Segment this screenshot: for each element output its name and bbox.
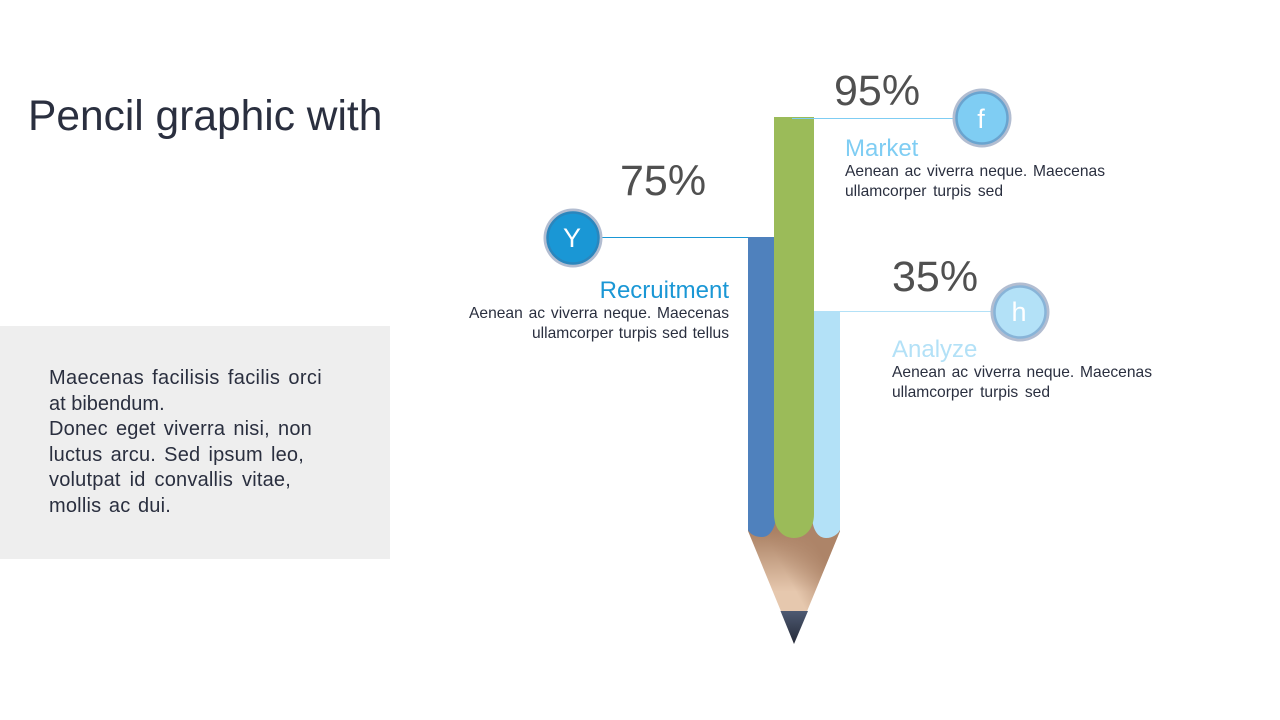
body: Analyze: Aenean ac viverra neque. Maecenas: [892, 364, 1152, 381]
pencil wood: [748, 520, 840, 643]
description text: mollis ac dui.: [49, 495, 171, 517]
body: Analyze: ullamcorper turpis sed: [892, 384, 1050, 401]
heading: Market: Market: [845, 135, 918, 162]
text block: Market: [845, 135, 1105, 200]
icon: f circle: [952, 88, 1012, 148]
connector: Recruitment: [600, 236, 748, 238]
description text: luctus arcu. Sed ipsum leo,: [49, 444, 304, 466]
icon: h circle: h: [1011, 297, 1027, 327]
bar: green 95%: [774, 117, 814, 538]
bar: light blue 35%: [812, 311, 840, 538]
body: Market: Aenean ac viverra neque. Maecenas: [845, 163, 1105, 180]
panel: description: [0, 326, 390, 559]
bar: blue 75%: [748, 237, 776, 537]
heading: Analyze: Analyze: [892, 336, 977, 363]
icon: Y circle: [544, 208, 602, 268]
connector: Market: [792, 118, 956, 120]
body: Recruitment: [469, 305, 729, 342]
body: Market: ullamcorper turpis sed: [845, 183, 1003, 200]
description text: volutpat id convallis vitae,: [49, 469, 291, 491]
description text: Maecenas facilisis facilis orci: [49, 367, 322, 389]
text block: Recruitment: [469, 277, 729, 342]
value: 35%: 35%: [892, 253, 978, 301]
icon: h circle: [990, 282, 1050, 342]
body: Analyze: [892, 364, 1152, 401]
icon: f circle: f: [977, 104, 985, 134]
connector: Analyze: [814, 310, 994, 312]
icon: Y circle: Y: [563, 223, 581, 253]
heading: Recruitment: Recruitment: [600, 277, 729, 304]
value: 75%: 75%: [620, 157, 706, 205]
description text: Donec eget viverra nisi, non: [49, 418, 312, 440]
pencil lead tip: [780, 611, 808, 644]
title: Pencil graphic with: [28, 93, 382, 140]
text block: Analyze: [892, 336, 1152, 401]
body: Market: [845, 163, 1105, 200]
value: 95%: 95%: [834, 67, 920, 115]
body: Recruitment: Aenean ac viverra neque. Maecenas: [469, 305, 729, 322]
body: Recruitment: ullamcorper turpis sed tellus: [532, 325, 729, 342]
description text: at bibendum.: [49, 393, 165, 415]
description text: [49, 367, 322, 517]
